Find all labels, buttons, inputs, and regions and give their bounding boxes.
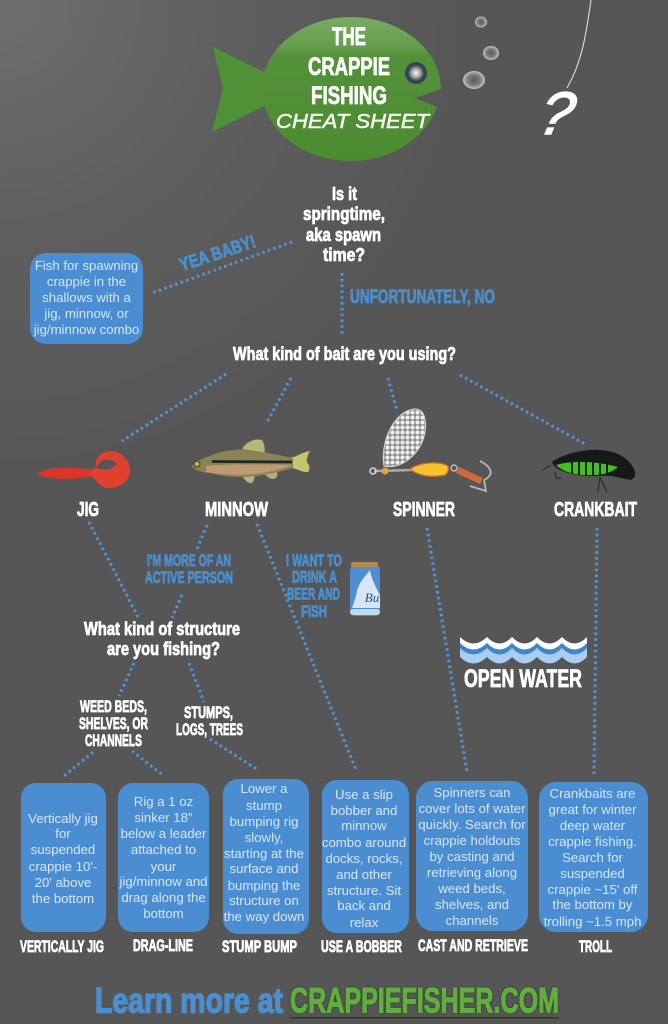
panel: drag-line [118, 783, 209, 932]
arrow: weed beds to vertically jig [63, 752, 93, 777]
label: weed beds: CHANNELS [85, 732, 142, 750]
arrow: spinner to cast and retrieve [427, 528, 467, 772]
arrow: bait to jig [122, 374, 226, 441]
arrow: stumps to stump bump [210, 739, 258, 770]
label: bait names [77, 498, 637, 521]
question: structure: are you fishing? [107, 638, 220, 659]
label: beer: I WANT TO [286, 552, 342, 570]
icon: fish body [262, 17, 441, 161]
panel: use a bobber [322, 780, 409, 933]
panel: troll: deep water [560, 818, 626, 833]
label: technique names [20, 937, 612, 956]
panel: troll: Search for [562, 850, 624, 865]
panel: stump bump: stump [246, 798, 282, 813]
panel: drag-line: jig/minnow and [119, 874, 207, 889]
arrow: no to bait question [340, 273, 344, 335]
label: stumps [176, 704, 243, 739]
label: technique names: VERTICALLY JIG [20, 938, 104, 956]
panel: use a bobber: structure. Sit [327, 883, 401, 898]
panel: spawning advice: jig/minnow combo [33, 322, 139, 337]
panel: troll: crappie fishing. [548, 834, 637, 849]
panel: spawning advice: crappie in the [47, 274, 126, 289]
panel: vertically jig: Vertically jig [28, 811, 98, 826]
panel: cast and retrieve: crappie holdouts [424, 833, 521, 848]
panel: use a bobber: bobber and [331, 803, 397, 818]
panel: stump bump: structure on [229, 893, 299, 908]
panel: stump bump: Lower a [241, 781, 288, 796]
panel: cast and retrieve: weed beds, [437, 881, 506, 896]
arrow: structure to weed beds [119, 663, 134, 696]
question: springtime [303, 183, 385, 265]
arrow: minnow to active label [197, 525, 207, 549]
panel: cast and retrieve: retrieving along [427, 865, 517, 880]
panel: drag-line: below a leader [121, 826, 207, 841]
label: weed beds: WEED BEDS, [80, 698, 147, 716]
footer text: learn more: Learn more at [95, 982, 283, 1020]
icon: minnow [192, 439, 310, 483]
panel: vertically jig: suspended [31, 842, 95, 857]
arrow: minnow to bobber [257, 524, 356, 770]
question: springtime: springtime, [303, 203, 385, 224]
title text: FISHING [311, 82, 387, 110]
panel: stump bump: the way down [224, 909, 304, 924]
label: beer: BEER AND [287, 586, 340, 604]
question: springtime: Is it [332, 183, 357, 204]
question: bait: What kind of bait are you using? [233, 343, 456, 364]
label: unfortunately no: UNFORTUNATELY, NO [350, 287, 495, 308]
panel: spawning advice [30, 253, 143, 344]
panel: cast and retrieve [416, 781, 528, 931]
panel: troll: the bottom by [553, 897, 633, 912]
title text [276, 23, 431, 133]
panel: stump bump: slowly, [245, 830, 283, 845]
panel: cast and retrieve: shelves, and [435, 897, 509, 912]
panel: use a bobber: relax [350, 915, 379, 930]
panel: use a bobber: docks, rocks, [326, 851, 402, 866]
panel: stump bump: starting at the [224, 846, 304, 861]
panel: spawning advice: shallows with a [42, 290, 132, 305]
label: technique names: TROLL [579, 938, 612, 956]
icon: bubbles [463, 16, 499, 89]
arrow: bait to minnow [266, 378, 291, 424]
arrow: structure to stumps [189, 663, 204, 702]
label: open water: OPEN WATER [464, 665, 582, 693]
label: beer [286, 552, 342, 621]
panel: spawning advice: Fish for spawning [35, 258, 138, 273]
panel: stump bump: bumping rig [230, 814, 298, 829]
question: springtime: time? [323, 244, 365, 265]
panel: drag-line: Rig a 1 oz [134, 794, 193, 809]
label: bait names: SPINNER [393, 498, 455, 521]
question: structure: What kind of structure [84, 618, 240, 639]
panel: drag-line: sinker 18" [134, 810, 193, 825]
panel: cast and retrieve: cover lots of water [418, 801, 526, 816]
label: technique names: DRAG-LINE [133, 937, 193, 955]
panel: drag-line: attached to [131, 842, 196, 857]
panel: troll: suspended [560, 866, 625, 881]
panel: cast and retrieve: quickly. Search for [418, 817, 526, 832]
title text: CHEAT SHEET [276, 111, 431, 133]
label: beer: FISH [301, 603, 327, 621]
icon: beer can: Bu [365, 590, 380, 605]
panel: troll [539, 782, 648, 932]
panel: vertically jig: crappie 10'- [29, 859, 97, 874]
question: springtime: aka spawn [306, 224, 381, 245]
label: yea baby: YEA BABY! [177, 231, 258, 275]
title text: CRAPPIE [308, 53, 390, 81]
icon: fishing line and question hook: ? [534, 80, 582, 147]
panel: spawning advice: jig, minnow, or [43, 306, 129, 321]
panel: vertically jig: 20' above [35, 875, 91, 890]
icon: spinner [370, 409, 491, 491]
icon: beer can [350, 562, 380, 616]
panel: stump bump: surface and [230, 861, 298, 876]
panel: vertically jig [21, 783, 106, 932]
label: weed beds: SHELVES, OR [79, 715, 148, 733]
label: active person [145, 552, 233, 587]
panel: drag-line: bottom [143, 906, 184, 921]
label: bait names: MINNOW [205, 498, 268, 521]
panel: drag-line: your [151, 859, 177, 874]
arrow: weed beds to drag-line [132, 751, 164, 776]
panel: troll: Crankbaits are [550, 786, 635, 801]
label: active person: ACTIVE PERSON [145, 569, 233, 587]
panel: troll: great for winter [549, 802, 637, 817]
panel: vertically jig: for [55, 826, 71, 841]
arrow: crankbait to troll [594, 528, 597, 774]
panel: use a bobber: back and [337, 898, 391, 913]
arrow: jig to structure lines [89, 522, 138, 617]
panel: drag-line: drag along the [121, 890, 206, 905]
icon: fish tail [212, 47, 264, 132]
icon: fishing line and question hook [534, 0, 591, 147]
label: beer: DRINK A [292, 568, 337, 586]
fish logo [212, 17, 441, 161]
panel: use a bobber: and other [336, 867, 392, 882]
arrow: yes to spawning box [152, 242, 292, 293]
label: bait names: JIG [77, 498, 99, 521]
panel: stump bump: bumping the [228, 878, 300, 893]
label: technique names: STUMP BUMP [222, 938, 297, 956]
label: technique names: CAST AND RETRIEVE [418, 937, 528, 955]
panel: troll: trolling ~1.5 mph [544, 914, 641, 929]
panel: vertically jig: the bottom [32, 891, 94, 906]
label: stumps: LOGS, TREES [176, 721, 243, 739]
label: active person: I'M MORE OF AN [147, 552, 231, 570]
icon: jig [37, 451, 130, 488]
panel: stump bump [223, 779, 309, 934]
icon: open water waves [460, 637, 587, 664]
panel: cast and retrieve: by casting and [429, 849, 515, 864]
panel: use a bobber: minnow [341, 818, 387, 833]
panel: cast and retrieve: Spinners can [434, 785, 510, 800]
panel: troll: crappie ~15' off [548, 882, 638, 897]
icon: fish eye [405, 62, 427, 84]
arrow: bait to spinner [388, 378, 397, 411]
footer link: crappiefisher.com: CRAPPIEFISHER.COM [290, 982, 559, 1020]
panel: use a bobber: Use a slip [335, 787, 393, 802]
arrow: active label to structure [172, 595, 182, 618]
arrow: bait to crankbait [460, 375, 585, 444]
label: weed beds [79, 698, 148, 750]
panel: cast and retrieve: channels [446, 913, 499, 928]
panel: use a bobber: combo around [322, 835, 406, 850]
icon: crankbait [543, 450, 635, 492]
title text: THE [332, 23, 366, 51]
label: stumps: STUMPS, [184, 704, 233, 722]
question: structure [84, 618, 240, 659]
footer [95, 982, 559, 1020]
label: technique names: USE A BOBBER [321, 938, 402, 956]
